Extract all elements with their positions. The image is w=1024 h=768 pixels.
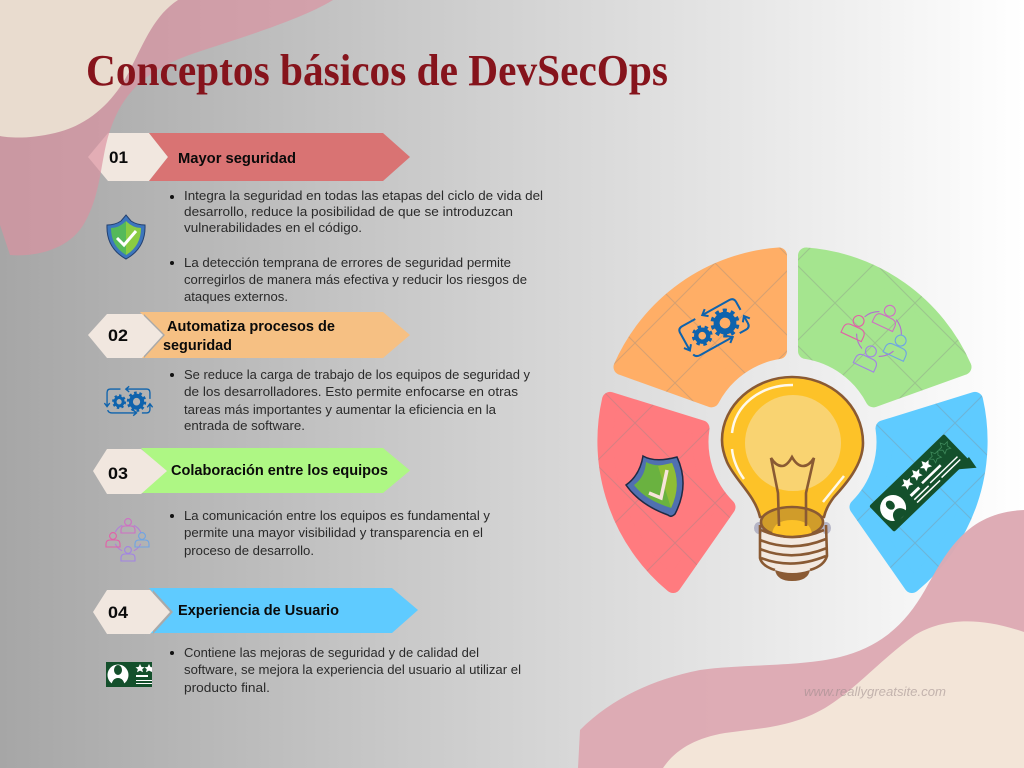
icon: review card on blue segment (869, 433, 978, 540)
banner 03 number: 03 (108, 464, 128, 483)
banner 03 heading: Colaboración entre los equipos (171, 463, 388, 479)
text block: automatización bullets: entrada de software. (184, 418, 305, 433)
text block: automatización bullets: Se reduce la carga de trabajo de los equipos de seguridad y (184, 367, 530, 382)
decorative blob: top left pink (0, 0, 333, 255)
banner 02 tab shadow (144, 314, 165, 358)
segment: orange automation (622, 256, 779, 399)
banner 04 number: 04 (108, 603, 129, 622)
icon: team on green segment (832, 291, 923, 382)
section 01: Mayor seguridad (107, 133, 543, 304)
text block: colaboración bullets (170, 508, 491, 558)
banner 01 heading: Mayor seguridad (178, 151, 296, 167)
text block: experiencia bullets (170, 645, 521, 695)
banner 04 tab shadow (153, 590, 173, 634)
text block: experiencia bullets: software, se mejora la experiencia del usuario al utilizar el (184, 662, 521, 677)
text block: experiencia bullets: producto final. (184, 680, 270, 695)
section 03: Colaboración (93, 448, 491, 561)
banner 01 ribbon (149, 133, 410, 181)
text block: colaboración bullets: La comunicación entre los equipos es fundamental y (184, 508, 491, 523)
banner 02 number: 02 (108, 326, 128, 345)
text block: colaboración bullets: proceso de desarrollo. (184, 543, 314, 558)
banner 02 number tab (88, 314, 163, 358)
radial diagram: four segments with bulb (597, 240, 990, 600)
text block: automatización bullets: tareas más importantes y aumentar la eficiencia en la (184, 402, 497, 417)
segment: green collaboration (806, 256, 964, 399)
text block: automatización bullets: de los desarrolladores. Esto permite enfocarse en otras (184, 384, 519, 399)
icon: gears on orange segment (672, 292, 756, 364)
banner 03 number tab (93, 449, 167, 494)
banner 02 ribbon (140, 312, 410, 358)
decorative blob: bottom right pink (578, 510, 1024, 768)
section 04: Experiencia de Usuario (93, 588, 521, 695)
text block: seguridad bullets: desarrollo, reduce la posibilidad de que se introduzcan (184, 204, 513, 219)
banner 04 ribbon (149, 588, 418, 633)
text block: experiencia bullets: Contiene las mejoras de seguridad y de calidad del (184, 645, 479, 660)
decorative blob: bottom right cream (663, 621, 1024, 768)
banner 01 number tab (88, 133, 168, 181)
text block: seguridad bullets: vulnerabilidades en el código. (184, 220, 362, 235)
title: Conceptos básicos de DevSecOps (86, 46, 668, 95)
text block: seguridad bullets: corregirlos de manera más efectiva y reducir los riesgos de (184, 272, 527, 287)
text block: colaboración bullets: permite una mayor visibilidad y transparencia en el (184, 525, 483, 540)
text block: seguridad bullets (170, 188, 543, 304)
decorative blob: top left cream (0, 0, 178, 138)
website footer: www.reallygreatsite.com (804, 685, 946, 699)
banner 03 ribbon (141, 448, 410, 493)
text block: seguridad bullets: ataques externos. (184, 289, 288, 304)
banner 01 number: 01 (109, 148, 128, 167)
text block: seguridad bullets: La detección temprana de errores de seguridad permite (184, 255, 511, 270)
icon: review card (106, 662, 152, 687)
segment: blue user experience (858, 400, 980, 585)
text block: automatización bullets (170, 367, 530, 433)
segment: red security (605, 400, 728, 585)
icon: shield on red segment (626, 456, 683, 516)
icon: team circle (106, 519, 149, 561)
section 02: Automatiza procesos (88, 312, 530, 433)
icon: gears with arrows (104, 386, 153, 416)
icon: light bulb (722, 377, 863, 581)
banner 04 heading: Experiencia de Usuario (178, 603, 339, 619)
banner 02 heading second line: seguridad (163, 338, 232, 354)
banner 04 number tab (93, 590, 170, 634)
text block: seguridad bullets: Integra la seguridad en todas las etapas del ciclo de vida del (184, 188, 543, 203)
icon: shield with check (107, 215, 145, 259)
banner 02 heading: Automatiza procesos de (167, 319, 335, 335)
